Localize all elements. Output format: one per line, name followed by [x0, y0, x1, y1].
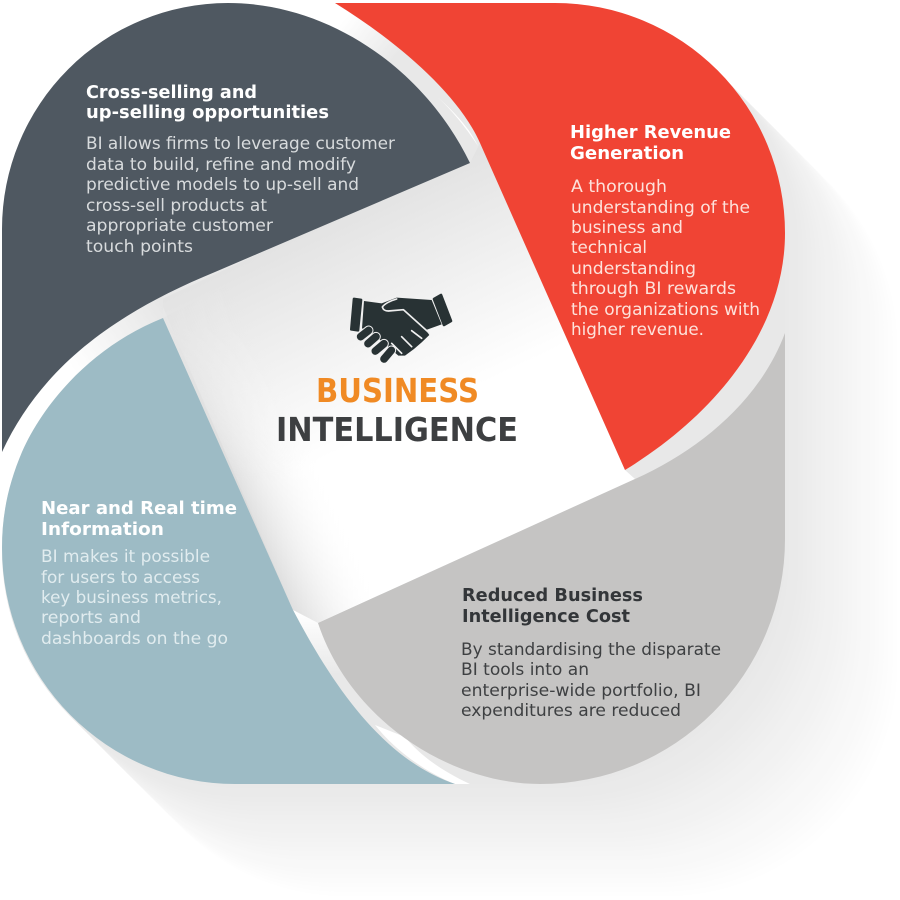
higher revenue text: understanding — [571, 259, 696, 279]
cross-selling text: data to build, refine and modify — [86, 155, 356, 175]
higher revenue text: A thorough — [571, 177, 667, 197]
panel: reduced cost — [318, 333, 785, 784]
near real time text: key business metrics, — [41, 588, 222, 608]
near real time text: dashboards on the go — [41, 629, 228, 649]
higher revenue text: Generation — [570, 143, 684, 164]
hand clasp — [362, 298, 442, 356]
higher revenue text: through BI rewards — [571, 279, 736, 299]
higher revenue text: understanding of the — [571, 198, 750, 218]
reduced cost text: BI tools into an — [461, 660, 589, 680]
higher revenue text: Higher Revenue — [570, 122, 731, 143]
title: INTELLIGENCE — [276, 410, 518, 449]
cross-selling text — [86, 82, 396, 257]
panel: cross-selling — [2, 3, 470, 452]
near real time text: BI makes it possible — [41, 547, 210, 567]
gray petal — [318, 333, 785, 784]
near real time text: Information — [41, 519, 164, 540]
teal petal — [2, 318, 455, 784]
right cuff — [434, 295, 451, 325]
panel: higher revenue — [335, 3, 785, 470]
higher revenue text: technical — [571, 238, 647, 258]
higher revenue text: higher revenue. — [571, 320, 704, 340]
higher revenue text: business and — [571, 218, 683, 238]
near real time text — [41, 498, 237, 649]
near real time text: Near and Real time — [41, 498, 237, 519]
near real time text: reports and — [41, 608, 141, 628]
icon: handshake — [351, 295, 451, 359]
cross-selling text: predictive models to up-sell and — [86, 175, 359, 195]
cross-selling text: touch points — [86, 237, 193, 257]
cross-selling text: cross-sell products at — [86, 196, 267, 216]
left cuff — [351, 299, 361, 330]
reduced cost text — [461, 585, 721, 721]
reduced cost text: enterprise-wide portfolio, BI — [461, 681, 701, 701]
title — [276, 371, 518, 449]
panel: near and real time — [2, 318, 455, 784]
reduced cost text: Intelligence Cost — [462, 606, 630, 627]
reduced cost text: Reduced Business — [462, 585, 643, 606]
fingers — [361, 330, 422, 359]
reduced cost text: expenditures are reduced — [461, 701, 681, 721]
thumb outline — [382, 299, 429, 333]
center background — [2, 7, 634, 784]
title: BUSINESS — [316, 371, 479, 410]
red petal — [335, 3, 785, 470]
reduced cost text: By standardising the disparate — [461, 640, 721, 660]
higher revenue text — [570, 122, 760, 340]
slate petal — [2, 3, 470, 452]
cross-selling text: BI allows firms to leverage customer — [86, 134, 396, 154]
cross-selling text: appropriate customer — [86, 216, 274, 236]
cross-selling text: up-selling opportunities — [86, 102, 329, 123]
higher revenue text: the organizations with — [571, 300, 760, 320]
cross-selling text: Cross-selling and — [86, 82, 257, 103]
near real time text: for users to access — [41, 568, 200, 588]
